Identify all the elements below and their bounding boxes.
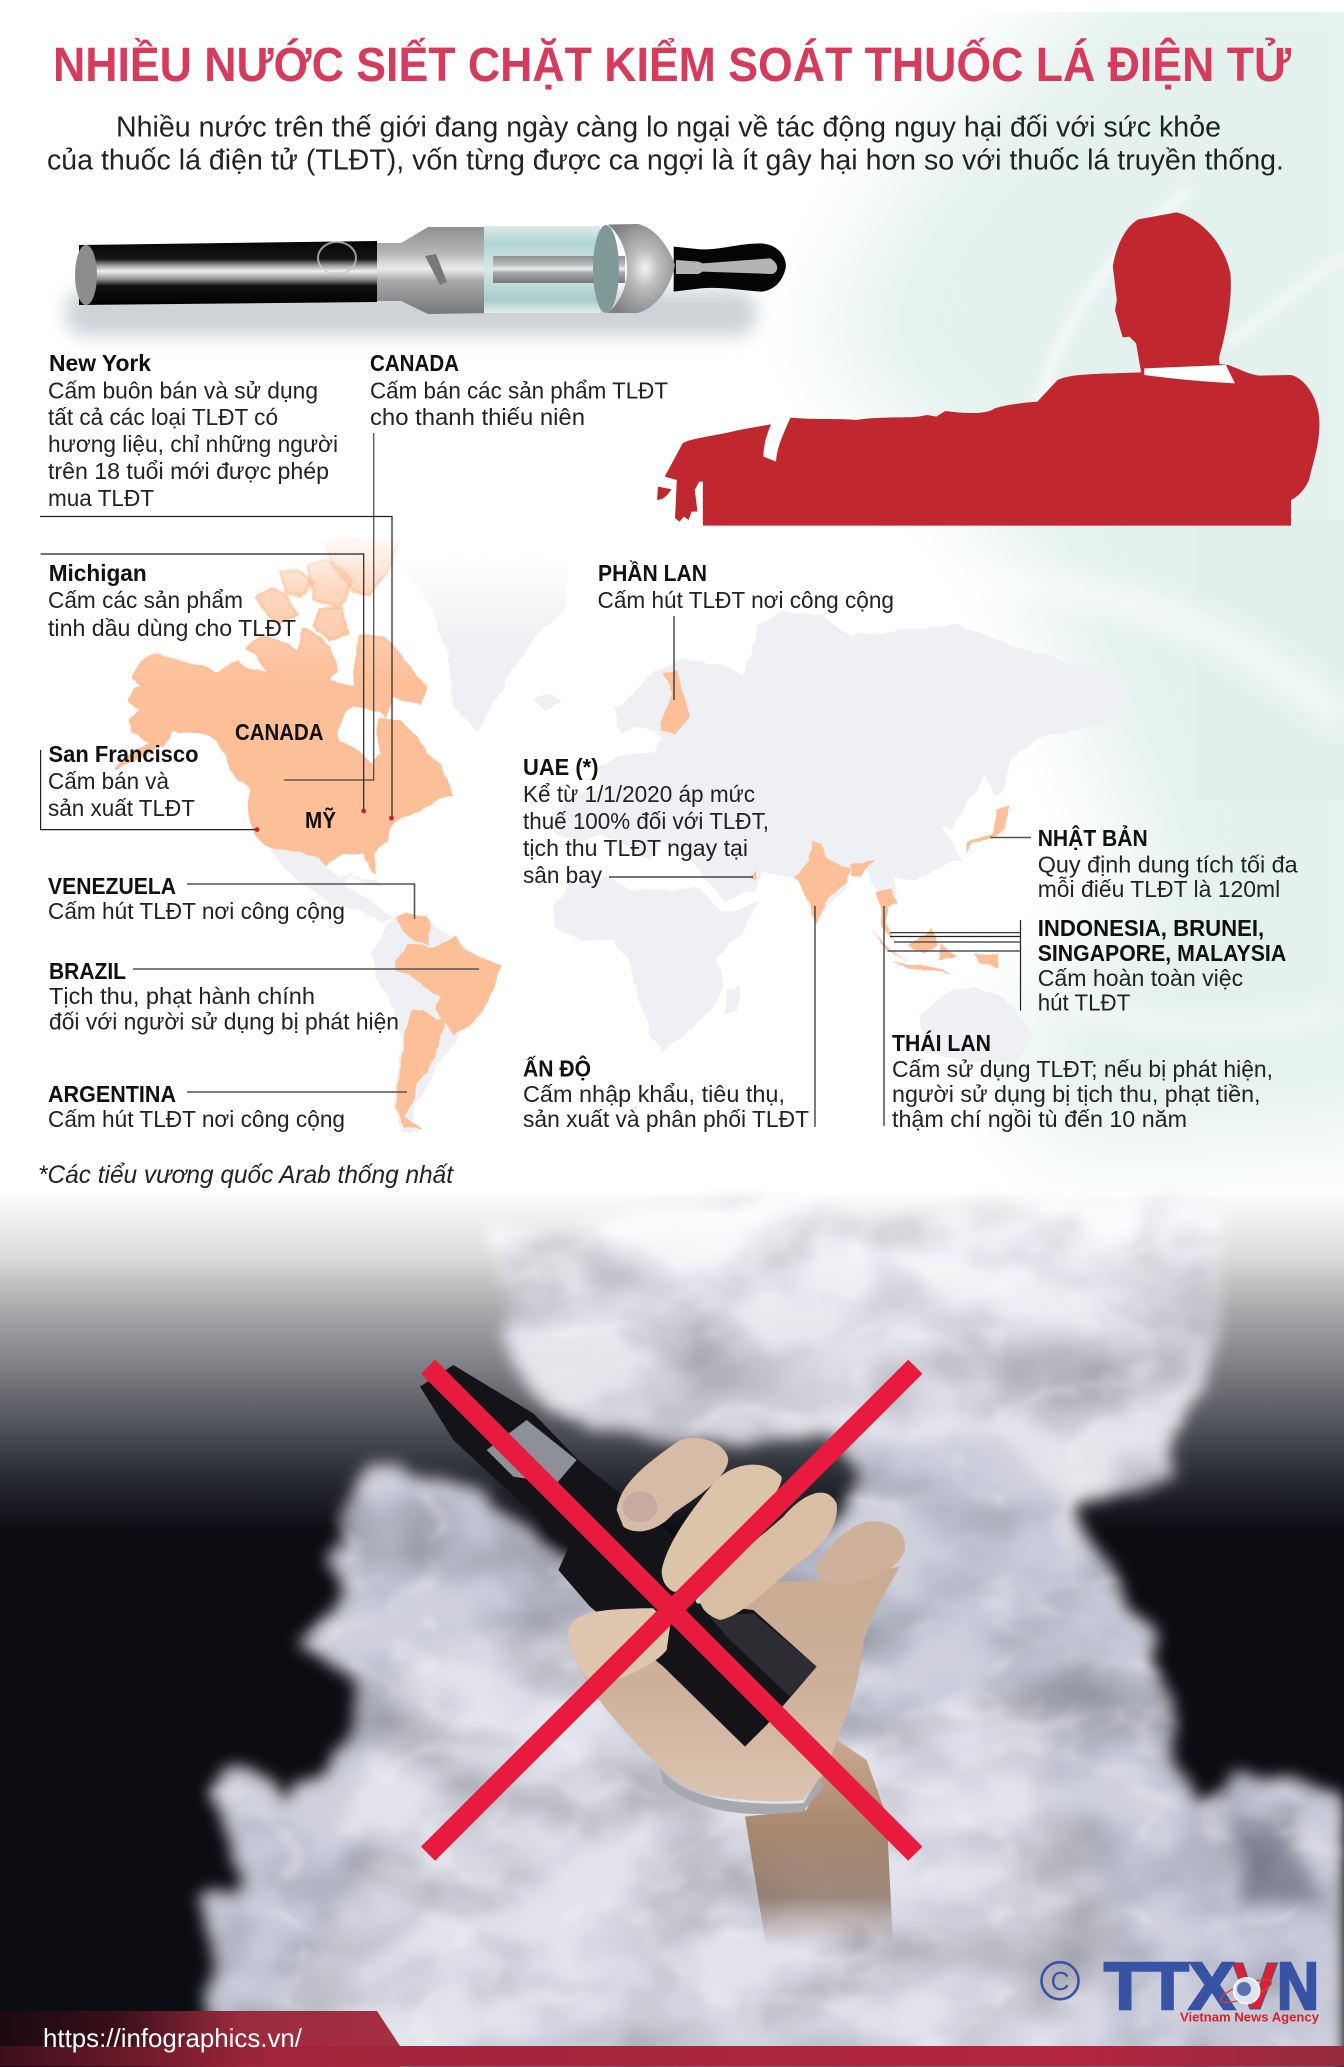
text: Venezuela <box>48 873 345 924</box>
text: Indonesia, Brunei, Singapore, Malaysia <box>1038 915 1286 1016</box>
text: UAE: UAE (*) <box>523 754 598 780</box>
text: Indonesia, Brunei, Singapore, Malaysia: hút TLĐT <box>1038 990 1130 1016</box>
finland <box>661 668 688 734</box>
argentina <box>395 1011 447 1131</box>
intro text: của thuốc lá điện tử (TLĐT), vốn từng được ca ngợi là ít gây hại hơn so với thuốc lá truyền thống. <box>47 144 1284 176</box>
text: New York: New York <box>49 350 152 376</box>
footer band <box>0 2011 1344 2067</box>
text: Canada: CANADA <box>370 350 459 376</box>
indonesia brunei singapore malaysia <box>871 929 909 961</box>
text: Japan <box>1038 823 1299 902</box>
north america: canada and usa <box>117 655 452 872</box>
text: San Francisco: sản xuất TLĐT <box>48 795 195 821</box>
text: New York <box>48 350 338 511</box>
text: Finland <box>598 559 894 613</box>
text: Canada: Cấm bán các sản phẩm TLĐT <box>370 378 668 404</box>
text: New York: tất cả các loại TLĐT có <box>48 404 278 430</box>
text: Michigan: tinh dầu dùng cho TLĐT <box>48 615 296 641</box>
text: Canada: cho thanh thiếu niên <box>370 404 585 430</box>
icon: man silhouette <box>657 212 1319 526</box>
greenland <box>397 553 567 733</box>
wrist <box>745 1740 893 1950</box>
photo: smoke <box>206 1207 1344 2067</box>
text: Thailand: THÁI LAN <box>892 1029 991 1056</box>
middle finger <box>662 1465 782 1592</box>
red cross over vape <box>428 1367 915 1854</box>
intro text: Nhiều nước trên thế giới đang ngày càng lo ngại về tác động nguy hại đối với sức khỏe <box>116 112 1221 144</box>
text: Japan: NHẬT BẢN <box>1038 823 1148 851</box>
text: Finland: Cấm hút TLĐT nơi công cộng <box>598 587 894 613</box>
text: India: Cấm nhập khẩu, tiêu thụ, <box>523 1081 785 1107</box>
text: New York: hương liệu, chỉ những người <box>48 431 338 457</box>
logo: TTXVN: N <box>1277 1949 1319 2024</box>
callout lines <box>40 433 1031 1127</box>
text: Thailand: Cấm sử dụng TLĐT; nếu bị phát hiện, <box>892 1056 1273 1082</box>
map label: USA: MỸ <box>305 806 336 833</box>
text: San Francisco <box>48 741 198 821</box>
logo: TTXVN: Vietnam News Agency <box>1180 2010 1320 2025</box>
text: Japan: Quy định dung tích tối đa <box>1038 852 1299 878</box>
text: Indonesia, Brunei, Singapore, Malaysia: Cấm hoàn toàn việc <box>1038 965 1243 991</box>
text: India: ẤN ĐỘ <box>523 1054 591 1082</box>
text: Japan: mỗi điếu TLĐT là 120ml <box>1038 876 1280 902</box>
vape glass tank <box>487 1420 577 1483</box>
text: UAE <box>523 754 769 888</box>
map label: Canada: CANADA <box>235 719 324 745</box>
text: Thailand <box>892 1029 1273 1132</box>
text: Thailand: thậm chí ngồi tù đến 10 năm <box>892 1106 1187 1132</box>
text: Canada <box>370 350 668 430</box>
text: Argentina <box>48 1081 345 1132</box>
footnote: *Các tiểu vương quốc Arab thống nhất <box>38 1161 454 1189</box>
intro text <box>47 112 1284 176</box>
text: Michigan <box>48 560 296 641</box>
footer url: https://infographics.vn/ <box>43 2023 303 2053</box>
logo: TTXVN: C <box>1051 1966 1069 1996</box>
photo: background gradient <box>0 1190 1344 2067</box>
text: Brazil: Tịch thu, phạt hành chính <box>49 983 315 1009</box>
vape side panel <box>710 1613 817 1697</box>
logo: TTXVN: V <box>1232 1949 1278 2024</box>
uae <box>749 870 757 879</box>
ring finger <box>700 1493 837 1620</box>
text: UAE: Kể từ 1/1/2020 áp mức <box>523 781 755 807</box>
text: Argentina: Cấm hút TLĐT nơi công cộng <box>48 1106 345 1132</box>
text: Michigan: Cấm các sản phẩm <box>48 587 243 613</box>
thailand <box>877 889 898 940</box>
text: Brazil <box>49 958 399 1034</box>
text: San Francisco: Cấm bán và <box>48 768 170 794</box>
text: Finland: PHẦN LAN <box>598 559 707 586</box>
thumb <box>568 1608 670 1687</box>
text: Venezuela: VENEZUELA <box>48 873 176 899</box>
text: UAE: sân bay <box>523 862 602 888</box>
text: Brazil: đối với người sử dụng bị phát hiện <box>49 1008 399 1034</box>
vape device <box>420 1365 817 1747</box>
text: Venezuela: Cấm hút TLĐT nơi công cộng <box>48 898 345 924</box>
text: Michigan: Michigan <box>49 560 147 586</box>
text: Brazil: BRAZIL <box>49 958 126 984</box>
logo: TTXVN <box>1042 1949 1320 2025</box>
text: Indonesia, Brunei, Singapore, Malaysia: INDONESIA, BRUNEI, <box>1038 915 1264 941</box>
background: pale teal wash <box>129 12 1344 1168</box>
text: India: sản xuất và phân phối TLĐT <box>523 1106 809 1132</box>
text: New York: trên 18 tuổi mới được phép <box>48 458 329 484</box>
mexico and central america <box>270 848 393 923</box>
text: Indonesia, Brunei, Singapore, Malaysia: SINGAPORE, MALAYSIA <box>1038 940 1286 966</box>
text: UAE: tịch thu TLĐT ngay tại <box>523 835 748 861</box>
venezuela <box>395 912 432 944</box>
text: Argentina: ARGENTINA <box>48 1081 176 1107</box>
palm <box>570 1567 900 1801</box>
text: India <box>523 1054 809 1132</box>
text: New York: mua TLĐT <box>48 485 154 511</box>
text: San Francisco: San Francisco <box>48 741 198 767</box>
text: UAE: thuế 100% đối với TLĐT, <box>523 808 769 834</box>
brazil <box>395 936 502 1037</box>
bracelet <box>660 1768 823 1814</box>
text: Thailand: người sử dụng bị tịch thu, phạt tiền, <box>892 1081 1260 1107</box>
world map: grey land with highlighted countries <box>117 540 1129 1133</box>
text: New York: Cấm buôn bán và sử dụng <box>48 378 318 404</box>
index finger <box>617 1438 728 1531</box>
icon: electronic cigarette <box>66 224 786 336</box>
logo: TTXVN: TTX <box>1104 1949 1235 2024</box>
india <box>793 841 850 923</box>
photo: hand holding vape <box>420 1365 905 1950</box>
japan <box>965 805 1008 854</box>
little finger <box>817 1521 905 1585</box>
